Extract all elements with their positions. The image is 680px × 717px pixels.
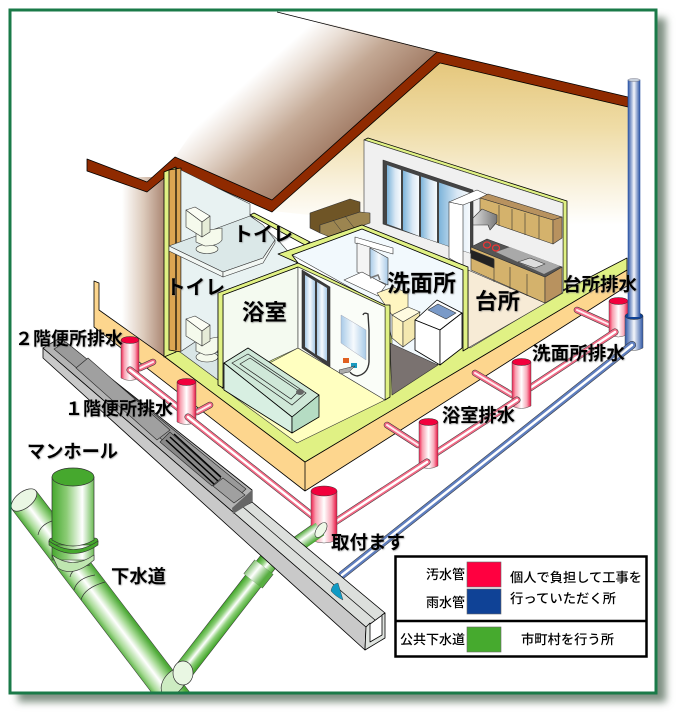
rain pipe outlet [331, 583, 343, 600]
label: bath drain: 浴室排水 [442, 405, 515, 426]
washroom floor [390, 343, 438, 395]
kitchen pillar [449, 190, 488, 266]
label: kitchen drain: 台所排水 [563, 274, 637, 295]
green connection cap [300, 520, 329, 543]
label: toilet lower: トイレ [166, 277, 225, 299]
bath partition wall [298, 267, 385, 400]
foundation [94, 270, 627, 491]
sofa [310, 199, 370, 237]
bathroom back wall [223, 267, 298, 388]
washing machine [415, 300, 462, 365]
label: connection box: 取付ます [331, 532, 405, 553]
legend text: private work line 1: 個人で負担して工事を [510, 570, 642, 585]
toilet lower [186, 316, 218, 362]
kitchen drain box [609, 298, 628, 337]
label: sewer: 下水道 [111, 566, 166, 587]
partition top strip [250, 213, 310, 245]
rain pipe [342, 345, 632, 575]
label: toilet upper: トイレ [233, 224, 293, 246]
legend text: sewage pipe: 汚水管 [426, 567, 465, 582]
floor slab [164, 258, 627, 462]
roof eave band [87, 52, 628, 212]
manhole [49, 468, 98, 572]
main connection box [311, 486, 337, 543]
bathtub [224, 348, 319, 433]
swatch: sewage pipe [467, 562, 501, 587]
legend [395, 556, 647, 656]
rain downpipe [628, 78, 640, 320]
living wall with window [364, 138, 567, 348]
bathroom window [341, 315, 366, 360]
upper floor plate [169, 216, 275, 277]
kitchen counter [471, 239, 562, 303]
bathroom floor [222, 348, 385, 443]
label: bathroom: 浴室 [242, 300, 287, 325]
toilet room wall [181, 170, 298, 380]
legend text: public sewer: 公共下水道 [400, 632, 465, 647]
kitchen upper cabinets [480, 194, 562, 244]
wall green top: wash and bath [218, 225, 468, 400]
foundation corner edge [304, 462, 306, 490]
swatch: rain pipe [467, 589, 501, 614]
label: 2F toilet drain: ２階便所排水 [15, 329, 123, 349]
vanity unit [344, 237, 393, 296]
bath drain box [419, 418, 438, 468]
pipe: 1F to main box [188, 417, 314, 517]
legend text: rain pipe: 雨水管 [426, 595, 465, 610]
label: kitchen: 台所 [475, 289, 520, 314]
sewer branch pipe lower [182, 549, 278, 673]
toilet upper [186, 207, 222, 254]
gutter channel [43, 338, 385, 650]
swatch: public sewer [467, 627, 501, 652]
washroom drain box [512, 358, 531, 408]
roof upper edge line [277, 12, 437, 52]
kitchen floor [468, 270, 563, 348]
sewer main pipe [7, 484, 178, 702]
pipe: washroom to bath [436, 400, 517, 453]
pipe: 2F to 1F [130, 370, 180, 409]
sliding door [302, 270, 330, 367]
label: 1F toilet drain: １階便所排水 [65, 399, 173, 419]
sewer branch pipe upper [294, 525, 315, 548]
toilet room floor [180, 340, 218, 380]
cardboard boxes [377, 287, 420, 347]
label: manhole: マンホール [27, 441, 118, 462]
range hood [473, 209, 497, 230]
rain box [625, 300, 643, 350]
2F toilet drain box [121, 336, 139, 380]
legend text: municipality: 市町村を行う所 [521, 632, 614, 647]
legend text: private work line 2: 行っていただく所 [510, 591, 616, 606]
toilet wing wall [164, 167, 181, 357]
1F toilet drain box [177, 378, 196, 424]
pipe: kitchen to washroom [530, 332, 615, 388]
red pipe stubs [140, 310, 610, 445]
roof underside surface [175, 10, 437, 200]
label: washroom: 洗面所 [387, 270, 456, 296]
interior back wall [274, 64, 628, 216]
shower and faucet [339, 313, 369, 376]
washroom wall [292, 229, 463, 395]
label: washroom drain: 洗面所排水 [532, 343, 625, 364]
pipe: bath to main box [335, 462, 427, 522]
exterior left wall [122, 177, 165, 358]
sewer joint [160, 660, 194, 692]
